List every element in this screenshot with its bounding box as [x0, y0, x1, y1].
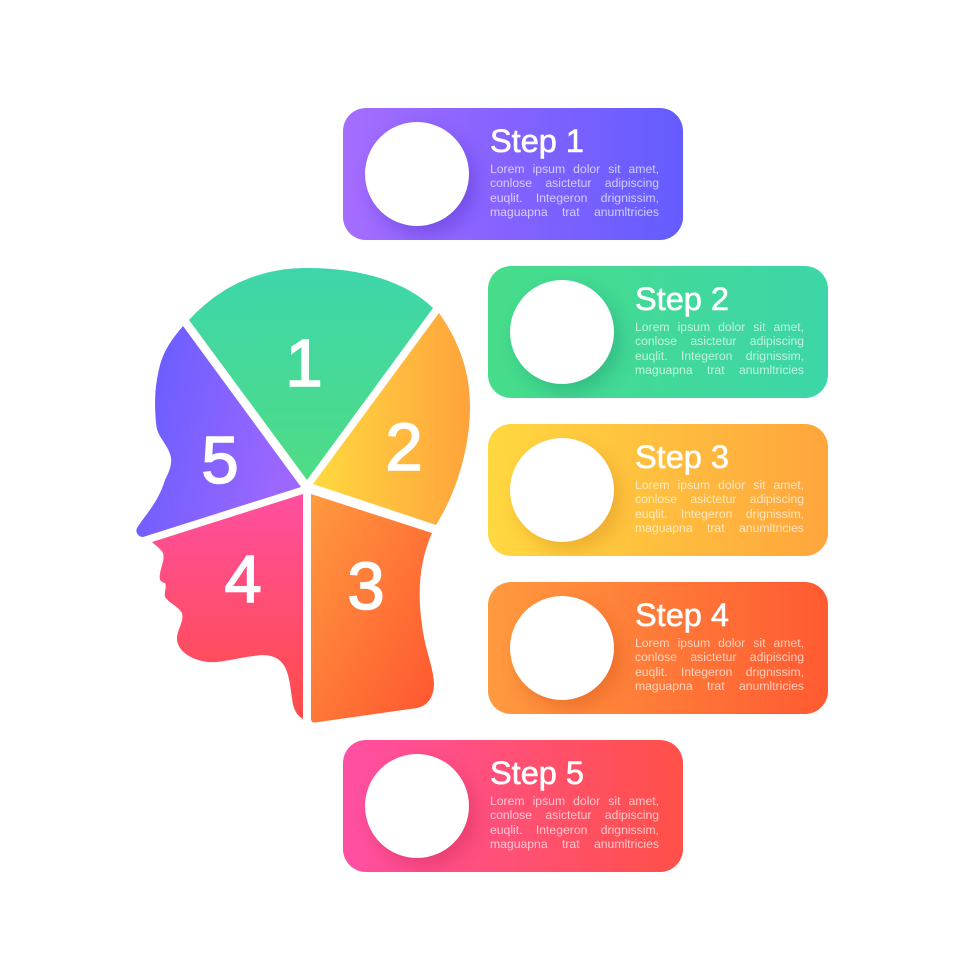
- number 4: 4: [224, 542, 262, 617]
- text block: step 2: maguapna trat anumltricies: [635, 363, 804, 377]
- segment 1: [189, 268, 433, 480]
- text block: step 3: conlose asictetur adipiscing: [635, 492, 804, 506]
- text block: step 4: Lorem ipsum dolor sit amet,: [635, 636, 804, 650]
- heading: step 4: Step 4: [635, 597, 729, 633]
- circle placeholder 2: [510, 280, 614, 384]
- text block: step 4: maguapna trat anumltricies: [635, 679, 804, 693]
- circle placeholder 5: [365, 754, 469, 858]
- text block: step 3: maguapna trat anumltricies: [635, 521, 804, 535]
- text block: step 1: Lorem ipsum dolor sit amet,: [490, 162, 659, 176]
- segment 3: [311, 494, 434, 723]
- text block: step 2: Lorem ipsum dolor sit amet,: [635, 320, 804, 334]
- number 1: 1: [285, 326, 323, 401]
- circle placeholder 3: [510, 438, 614, 542]
- text block: step 1: maguapna trat anumltricies: [490, 205, 659, 219]
- text block: step 1: [490, 162, 659, 219]
- text block: step 4: conlose asictetur adipiscing: [635, 650, 804, 664]
- card: step 4: [488, 582, 828, 714]
- card: step 2: [488, 266, 828, 398]
- heading: step 3: Step 3: [635, 439, 729, 475]
- text block: step 5: Lorem ipsum dolor sit amet,: [490, 794, 659, 808]
- segment 5: [136, 326, 301, 537]
- text block: step 3: [635, 478, 804, 535]
- segment 4: [152, 494, 303, 719]
- card: step 1: [343, 108, 683, 240]
- text block: step 2: [635, 320, 804, 377]
- number 3: 3: [347, 549, 385, 624]
- text block: step 5: [490, 794, 659, 851]
- text block: step 1: conlose asictetur adipiscing: [490, 176, 659, 190]
- heading: step 2: Step 2: [635, 281, 729, 317]
- circle placeholder 1: [365, 122, 469, 226]
- text block: step 2: conlose asictetur adipiscing: [635, 334, 804, 348]
- circle placeholder 4: [510, 596, 614, 700]
- text block: step 5: conlose asictetur adipiscing: [490, 808, 659, 822]
- heading: step 1: Step 1: [490, 123, 584, 159]
- text block: step 3: euqlit. Integeron drignissim,: [635, 507, 804, 521]
- card: step 5: [343, 740, 683, 872]
- text block: step 5: euqlit. Integeron drignissim,: [490, 823, 659, 837]
- text block: step 1: euqlit. Integeron drignissim,: [490, 191, 659, 205]
- number 5: 5: [201, 423, 239, 498]
- text block: step 2: euqlit. Integeron drignissim,: [635, 349, 804, 363]
- text block: step 4: [635, 636, 804, 693]
- segment 2: [313, 313, 470, 525]
- text block: step 3: Lorem ipsum dolor sit amet,: [635, 478, 804, 492]
- text block: step 5: maguapna trat anumltricies: [490, 837, 659, 851]
- text block: step 4: euqlit. Integeron drignissim,: [635, 665, 804, 679]
- number 2: 2: [385, 410, 423, 485]
- card: step 3: [488, 424, 828, 556]
- heading: step 5: Step 5: [490, 755, 584, 791]
